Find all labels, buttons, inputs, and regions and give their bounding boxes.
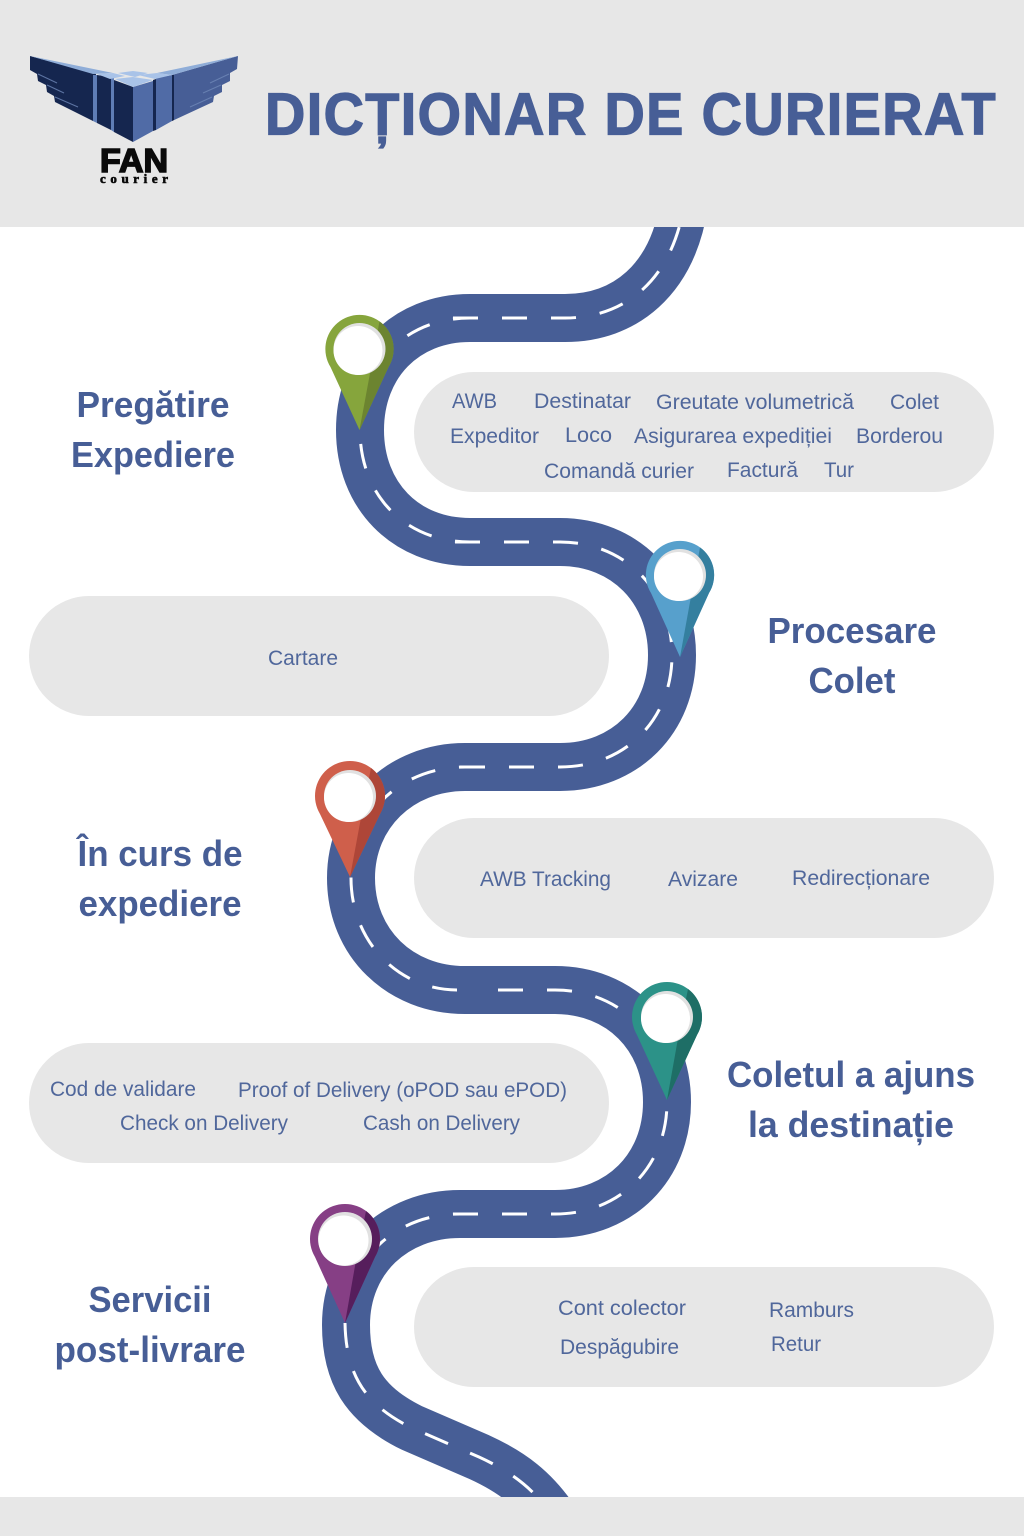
panel: Coletul a ajuns terms: Cod de validare (50, 1077, 196, 1101)
logo: FAN Courier (30, 56, 238, 186)
heading: În curs de expediere: expediere (78, 883, 242, 924)
panel: Coletul a ajuns terms: Check on Delivery (120, 1111, 288, 1135)
heading: Servicii post-livrare: Servicii (88, 1279, 212, 1320)
icon: purple map pin (310, 1204, 380, 1323)
panel: Pregătire Expediere terms: Asigurarea expediției (634, 424, 832, 448)
panel: Pregătire Expediere terms: Comandă curier (544, 459, 694, 483)
heading: Servicii post-livrare: post-livrare (54, 1329, 246, 1370)
panel: Pregătire Expediere terms: Factură (727, 458, 798, 482)
panel: Coletul a ajuns terms: Cash on Delivery (363, 1111, 520, 1135)
panel: Pregătire Expediere terms: AWB (452, 389, 497, 413)
panel: Pregătire Expediere terms: Expeditor (450, 424, 539, 448)
panel: În curs de expediere terms: Redirecționare (792, 866, 930, 890)
heading: Coletul a ajuns la destinație (727, 1054, 975, 1146)
logo: FAN Courier: FAN (100, 142, 168, 179)
panel: În curs de expediere terms: Avizare (668, 867, 738, 891)
heading: Pregătire Expediere: Pregătire (76, 384, 230, 425)
panel: În curs de expediere terms: AWB Tracking (480, 867, 611, 891)
panel: Pregătire Expediere terms: Destinatar (534, 389, 631, 413)
icon: blue map pin (646, 541, 714, 657)
panel: Servicii post-livrare terms (414, 1267, 994, 1387)
panel: Servicii post-livrare terms: Ramburs (769, 1298, 854, 1322)
icon: green map pin (325, 315, 394, 430)
header band (0, 0, 1024, 227)
logo: FAN Courier: courier (100, 171, 168, 186)
title: DICȚIONAR DE CURIERAT (265, 82, 997, 148)
icon: teal map pin (632, 982, 702, 1100)
panel: Servicii post-livrare terms: Cont colector (558, 1296, 686, 1320)
heading: Pregătire Expediere: Expediere (71, 434, 235, 475)
panel: Servicii post-livrare terms: Despăgubire (560, 1335, 679, 1359)
panel: Coletul a ajuns terms: Proof of Delivery (oPOD sau ePOD) (238, 1078, 567, 1102)
heading: Procesare Colet: Colet (808, 660, 896, 701)
panel: În curs de expediere terms (414, 818, 994, 938)
heading: Pregătire Expediere (71, 384, 235, 475)
panel: Pregătire Expediere terms: Tur (824, 458, 854, 482)
heading: Procesare Colet: Procesare (768, 610, 936, 651)
winding road (345, 205, 684, 1515)
heading: Coletul a ajuns la destinație: Coletul a ajuns (727, 1054, 975, 1095)
panel: Pregătire Expediere terms: Loco (565, 423, 612, 447)
panel: Coletul a ajuns terms (29, 1043, 609, 1163)
panel: Pregătire Expediere terms: Colet (890, 390, 939, 414)
panel: Pregătire Expediere terms: Borderou (856, 424, 943, 448)
panel: Pregătire Expediere terms (414, 372, 994, 492)
heading: Coletul a ajuns la destinație: la destinație (748, 1104, 954, 1146)
panel: Procesare Colet terms: Cartare (268, 646, 338, 670)
heading: Procesare Colet (768, 610, 936, 701)
panel: Procesare Colet terms (29, 596, 609, 716)
footer band (0, 1497, 1024, 1536)
heading: În curs de expediere: În curs de (76, 832, 242, 874)
panel: Pregătire Expediere terms: Greutate volumetrică (656, 390, 854, 414)
panel: Servicii post-livrare terms: Retur (771, 1332, 821, 1356)
icon: red map pin (315, 761, 385, 877)
heading: În curs de expediere (76, 832, 242, 924)
heading: Servicii post-livrare (54, 1279, 246, 1370)
